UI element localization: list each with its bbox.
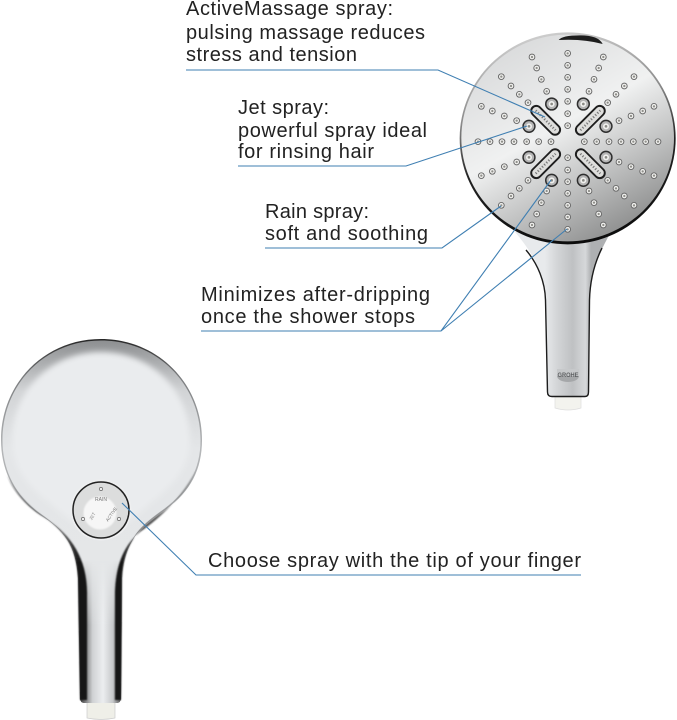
callout: ActiveMassage spray (186, 0, 545, 117)
callout: ActiveMassage spray: stress and tension (186, 44, 357, 66)
callout: choose spray: Choose spray with the tip of your finger (208, 550, 581, 572)
rain nozzles (475, 50, 661, 233)
callout: choose spray (122, 503, 581, 575)
callout: Rain spray: Rain spray: (265, 201, 369, 223)
GROHE logo (557, 369, 579, 382)
callout: Jet spray: powerful spray ideal (238, 120, 427, 142)
handle right shadow band (115, 470, 196, 700)
leader line: Rain (265, 206, 501, 248)
handle edges: front (526, 248, 602, 396)
ActiveMassage spray pills (528, 102, 608, 182)
selector button (70, 480, 132, 540)
callout: Rain spray (265, 201, 501, 248)
head face (461, 35, 674, 241)
back shower (1, 339, 202, 720)
leader line: choose spray (122, 503, 581, 575)
selector button: JET (88, 511, 97, 521)
callout: Jet spray (238, 97, 527, 166)
callout: after-dripping (201, 180, 567, 331)
inner face: back (12, 352, 190, 530)
callout: Rain spray: soft and soothing (265, 223, 428, 245)
front shower head (460, 32, 676, 244)
selector button: RAIN (95, 497, 107, 503)
jet nozzles (522, 97, 613, 187)
front shower handle (515, 232, 611, 410)
handle body: front (515, 232, 611, 397)
callout: Jet spray: Jet spray: (238, 97, 329, 119)
selector button: ACTIVE (105, 506, 118, 522)
leader lines: after-dripping (201, 180, 567, 331)
callout: after-dripping: once the shower stops (201, 306, 415, 328)
GROHE logo: GROHE (558, 372, 579, 379)
callout: Jet spray: for rinsing hair (238, 141, 374, 163)
handle left shadow band (7, 475, 87, 700)
top notch (559, 35, 603, 44)
hose connector: front (555, 397, 581, 410)
leader line: ActiveMassage (186, 70, 545, 117)
head shading: back (2, 340, 200, 702)
leader line: Jet (238, 126, 527, 166)
head rim (460, 32, 676, 244)
back body (1, 339, 202, 703)
callout: after-dripping: Minimizes after-dripping (201, 284, 430, 306)
callout: ActiveMassage spray: pulsing massage reduces (186, 22, 425, 44)
hose connector: back (87, 700, 115, 720)
handle chrome: back (80, 560, 122, 703)
